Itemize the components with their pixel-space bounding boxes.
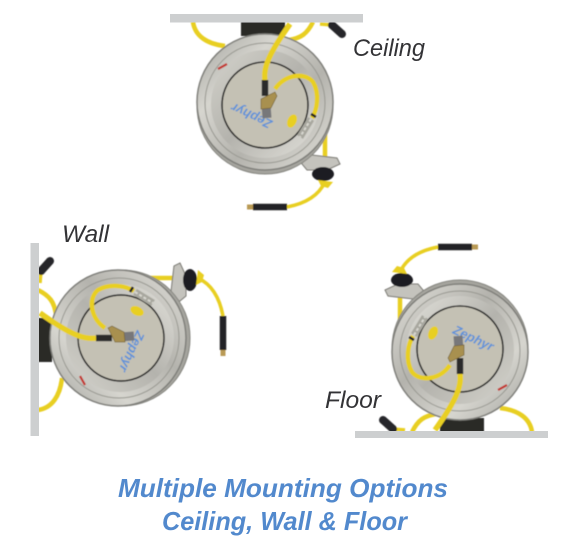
floor reel (355, 247, 548, 438)
title: Multiple Mounting Options (118, 473, 448, 503)
title (118, 473, 448, 536)
label: wall: Wall (62, 221, 110, 248)
label: ceiling: Ceiling (353, 35, 426, 62)
label: floor: Floor (325, 387, 382, 414)
ceiling mounting bar (170, 14, 363, 22)
title: Ceiling, Wall & Floor (162, 506, 409, 536)
floor mounting bar (355, 431, 548, 438)
wall mounting bar (30, 243, 39, 436)
ceiling reel (170, 14, 363, 207)
wall reel (30, 243, 223, 436)
